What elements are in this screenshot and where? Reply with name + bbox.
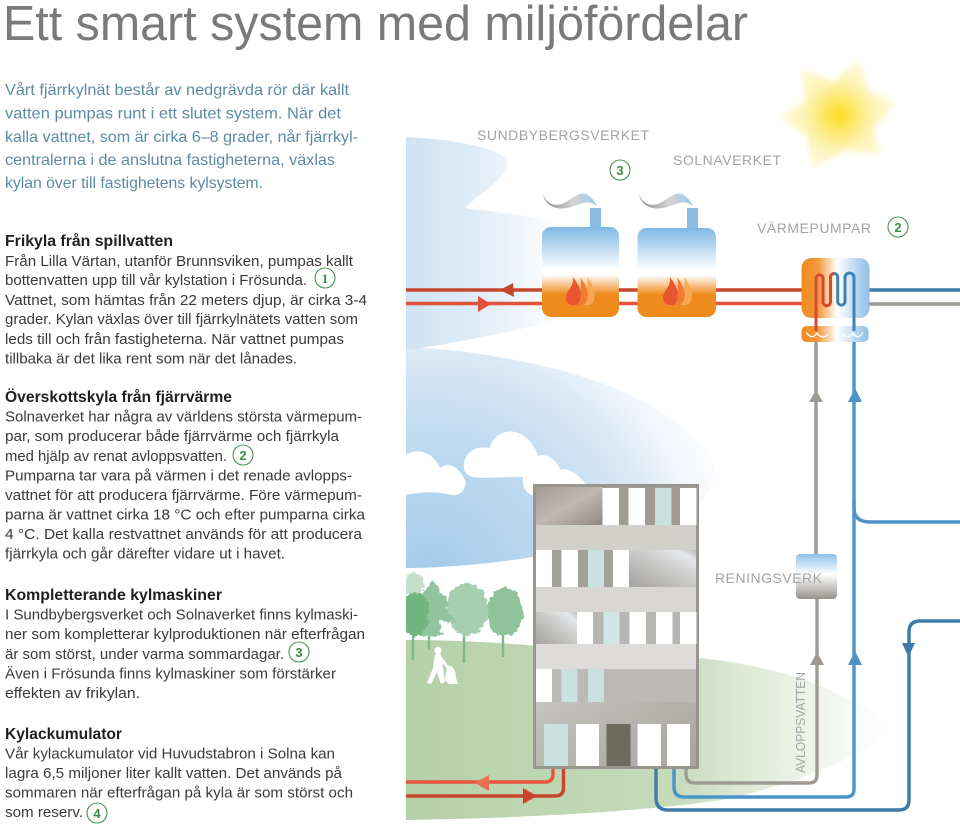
text block: Kylackumulator xyxy=(5,726,353,823)
intro text: centralerna i de anslutna fastigheterna, växlas xyxy=(5,152,335,169)
marker 2 on diagram: 2 xyxy=(894,220,902,235)
text block: Kylackumulator: Kylackumulator xyxy=(5,726,122,743)
floor 4 xyxy=(536,669,696,702)
text block: Överskottskyla från fjärrvärme: Pumparna tar vara på värmen i det renade avlopps- xyxy=(5,468,352,484)
text block: Kompletterande kylmaskiner: I Sundbybergsverket och Solnaverket finns kylmaski- xyxy=(5,606,358,624)
flames xyxy=(566,277,595,305)
text block: Frikyla från spillvatten: tillbaka är det lika rent som när det lånades. xyxy=(5,350,297,368)
marker 2 xyxy=(233,445,253,465)
text block: Kompletterande kylmaskiner: effekten av frikylan. xyxy=(5,685,140,702)
floor 1 xyxy=(536,487,696,525)
arrow: left xyxy=(475,775,489,791)
arrow: blue up lower xyxy=(848,651,862,665)
text block: Överskottskyla från fjärrvärme: parna är vattnet cirka 18 °C och efter pumparna cirka xyxy=(5,506,366,524)
right pipes from heat pump xyxy=(865,290,960,304)
text block: Frikyla från spillvatten xyxy=(5,233,367,368)
text block: Frikyla från spillvatten: grader. Kylan växlas över till fjärrkylnätets vatten som xyxy=(5,311,358,328)
text block: Överskottskyla från fjärrvärme: 4 °C. Det kalla restvattnet används för att producera xyxy=(5,526,363,543)
arrow: right xyxy=(523,788,537,804)
arrow: down xyxy=(902,643,915,657)
blue pipe to the right xyxy=(674,342,960,797)
arrow: left xyxy=(500,283,514,297)
marker 3 xyxy=(289,642,309,662)
clouds xyxy=(406,432,587,497)
sky lower xyxy=(406,348,714,568)
marker 4: 4 xyxy=(93,806,101,821)
text block: Kompletterande kylmaskiner: ner som kompletterar kylproduktionen när efterfrågan xyxy=(5,626,365,643)
text block: Kompletterande kylmaskiner: Kompletterande kylmaskiner xyxy=(5,587,222,604)
trees xyxy=(401,573,523,663)
intro text xyxy=(5,81,358,192)
text block: Kompletterande kylmaskiner xyxy=(5,587,365,702)
ground floor xyxy=(544,724,690,766)
intro text: kylan över till fastighetens kylsystem. xyxy=(5,175,263,192)
text block: Överskottskyla från fjärrvärme: par, som producerar både fjärrvärme och fjärrkyla xyxy=(5,428,340,445)
text block: Kylackumulator: som reserv. xyxy=(5,804,83,821)
text block: Kompletterande kylmaskiner: Även i Frösunda finns kylmaskiner som förstärker xyxy=(5,666,336,682)
sky upper xyxy=(406,137,560,350)
text block: Kylackumulator: lagra 6,5 miljoner liter kallt vatten. Det används på xyxy=(5,765,343,782)
floor 3 xyxy=(536,612,696,644)
upper pipes xyxy=(406,283,802,312)
labels: SUNDBYBERGSVERKET xyxy=(477,127,649,143)
reningsverk label: RENINGSVERK xyxy=(715,570,823,586)
arrow: blue up xyxy=(848,388,862,402)
plant: Solnaverket xyxy=(638,194,716,317)
bottom red pipes xyxy=(406,768,564,804)
marker 1: 1 xyxy=(322,271,328,286)
text block: Kompletterande kylmaskiner: är som störst, under varma sommardagar. xyxy=(5,646,284,663)
intro text: Vårt fjärrkylnät består av nedgrävda rör där kallt xyxy=(5,81,350,99)
dark blue return pipe xyxy=(656,621,960,810)
labels: VÄRMEPUMPAR xyxy=(757,220,871,236)
marker 4 xyxy=(87,803,107,823)
reningsverk box xyxy=(796,554,837,599)
text block: Frikyla från spillvatten: bottenvatten upp till vår kylstation i Frösunda. xyxy=(5,272,307,289)
intro text: kalla vattnet, som är cirka 6–8 grader, når fjärrkyl- xyxy=(5,128,358,146)
text block: Frikyla från spillvatten: leds till och från fastigheterna. När vattnet pumpas xyxy=(5,331,344,348)
marker 2 on diagram xyxy=(888,217,908,237)
text block: Kylackumulator: Vår kylackumulator vid Huvudstabron i Solna kan xyxy=(5,746,335,762)
text block: Frikyla från spillvatten: Vattnet, som hämtas från 22 meters djup, är cirka 3-4 xyxy=(5,292,367,309)
arrow: grey up xyxy=(809,390,823,402)
text block: Överskottskyla från fjärrvärme: Solnaverket har några av världens största värmepum- xyxy=(5,408,362,426)
text block: Överskottskyla från fjärrvärme: med hjälp av renat avloppsvatten. xyxy=(5,448,227,465)
plant: Sundbybergsverket xyxy=(542,194,619,317)
ground xyxy=(406,640,884,820)
marker 1 xyxy=(315,268,335,288)
evaporator box xyxy=(802,326,868,342)
arrow: right xyxy=(478,296,491,312)
text block: Överskottskyla från fjärrvärme: fjärrkyla och går därefter vidare ut i havet. xyxy=(5,546,285,562)
text block: Överskottskyla från fjärrvärme: vattnet för att producera fjärrvärme. Före värmepum- xyxy=(5,487,362,504)
arrow: grey up lower xyxy=(810,652,824,665)
intro text: vatten pumpas runt i ett slutet system. När det xyxy=(5,106,342,122)
coil: cold side xyxy=(834,273,854,331)
band xyxy=(536,587,696,612)
person with stroller xyxy=(427,647,458,684)
marker 3: 3 xyxy=(295,645,303,660)
marker 2: 2 xyxy=(239,448,247,463)
building xyxy=(534,486,698,768)
grey sewage pipe xyxy=(686,342,824,783)
text block: Kylackumulator: sommaren när efterfrågan på kyla är som störst och xyxy=(5,784,353,802)
text block: Överskottskyla från fjärrvärme xyxy=(5,389,366,562)
labels xyxy=(477,127,871,236)
floor 2 xyxy=(536,550,696,587)
label: avloppsvatten: AVLOPPSVATTEN xyxy=(794,672,808,773)
band xyxy=(536,644,696,669)
flames xyxy=(663,277,692,305)
coil: warm side xyxy=(816,274,834,331)
labels: SOLNAVERKET xyxy=(673,152,781,168)
marker 3 on diagram xyxy=(610,160,630,180)
sun xyxy=(778,58,897,169)
text block: Frikyla från spillvatten: Frikyla från spillvatten xyxy=(5,233,173,250)
text block: Frikyla från spillvatten: Från Lilla Värtan, utanför Brunnsviken, pumpas kallt xyxy=(5,253,354,270)
band xyxy=(536,525,696,550)
heat pump xyxy=(802,258,870,342)
marker 3 on diagram: 3 xyxy=(616,163,624,178)
text block: Överskottskyla från fjärrvärme: Överskottskyla från fjärrvärme xyxy=(5,389,232,406)
